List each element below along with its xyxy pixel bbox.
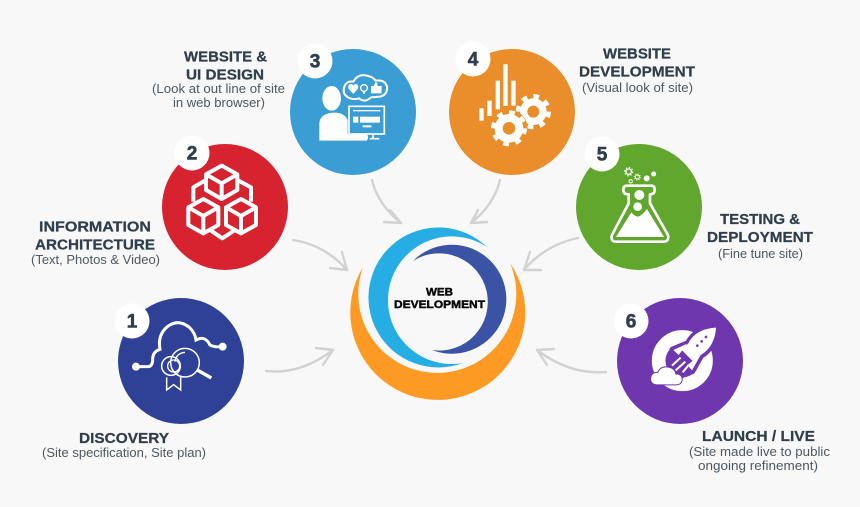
step 1: discovery bbox=[114, 298, 244, 424]
icon: person at monitor with idea cloud bbox=[319, 75, 387, 141]
circle 4 bbox=[449, 49, 575, 175]
circle 3 bbox=[290, 49, 416, 175]
label: website development: DEVELOPMENT bbox=[579, 64, 695, 80]
label: testing and deployment: (Fine tune site) bbox=[718, 247, 803, 261]
icon: cloud with magnifier and award bbox=[132, 323, 227, 390]
label: website and UI design: UI DESIGN bbox=[186, 68, 264, 84]
circle 6 bbox=[617, 298, 743, 424]
circle 2 bbox=[162, 144, 288, 270]
center title: DEVELOPMENT bbox=[394, 299, 485, 311]
arrow: step 2 to center bbox=[293, 240, 347, 270]
number badge 5: 5 bbox=[597, 144, 608, 166]
step 6: launch and live bbox=[614, 298, 743, 424]
arrow: step 4 to center bbox=[471, 180, 500, 223]
number badge 4: 4 bbox=[468, 50, 479, 70]
center logo: web development bbox=[350, 227, 525, 400]
label: launch and live: (Site made live to public bbox=[689, 445, 830, 459]
label: testing and deployment bbox=[707, 212, 813, 261]
icon: three cubes bbox=[188, 166, 256, 238]
arrow: step 6 to center bbox=[537, 349, 606, 372]
center title bbox=[394, 286, 485, 311]
step 3: website and UI design bbox=[290, 44, 416, 175]
label: discovery bbox=[42, 431, 206, 460]
number badge 3: 3 bbox=[310, 52, 320, 72]
light blue crescent bbox=[368, 227, 487, 367]
label: launch and live: ongoing refinement) bbox=[698, 459, 818, 473]
number badge 6: 6 bbox=[626, 312, 636, 332]
arrow: step 5 to center bbox=[524, 238, 578, 270]
label: information architecture: ARCHITECTURE bbox=[35, 238, 155, 254]
icon: bars and gears bbox=[479, 64, 549, 147]
dark blue crescent bbox=[413, 245, 506, 354]
circle 1 bbox=[118, 298, 244, 424]
label: testing and deployment: DEPLOYMENT bbox=[707, 230, 813, 246]
number badge 1: 1 bbox=[127, 312, 138, 332]
icon: rocket, ring and cloud bbox=[651, 328, 716, 384]
label: launch and live: LAUNCH / LIVE bbox=[702, 429, 815, 445]
label: testing and deployment: TESTING & bbox=[720, 212, 801, 228]
label: website development bbox=[579, 46, 695, 95]
number badge 2: 2 bbox=[187, 144, 197, 164]
label: information architecture bbox=[31, 220, 160, 267]
label: website and UI design: WEBSITE & bbox=[184, 50, 268, 66]
label: website and UI design: in web browser) bbox=[173, 96, 265, 110]
label: website and UI design: (Look at out line of site bbox=[152, 82, 285, 96]
label: website development: (Visual look of site) bbox=[582, 81, 693, 95]
icon: flask with bubbles and gears bbox=[612, 168, 668, 242]
arrow: step 1 to center bbox=[266, 348, 333, 372]
label: website development: WEBSITE bbox=[603, 46, 671, 62]
step 5: testing and deployment bbox=[576, 136, 702, 270]
circle 5 bbox=[576, 144, 702, 270]
label: information architecture: (Text, Photos & Video) bbox=[31, 253, 160, 267]
label: website and UI design bbox=[152, 50, 285, 110]
center title: WEB bbox=[426, 286, 453, 298]
arrow: step 3 to center bbox=[372, 180, 401, 223]
label: discovery: DISCOVERY bbox=[79, 431, 169, 447]
step 4: website development bbox=[449, 42, 575, 175]
orange crescent bbox=[350, 263, 525, 400]
step 2: information architecture bbox=[162, 136, 288, 270]
label: information architecture: INFORMATION bbox=[39, 220, 151, 236]
label: discovery: (Site specification, Site plan) bbox=[42, 446, 206, 460]
label: launch and live bbox=[689, 429, 830, 473]
